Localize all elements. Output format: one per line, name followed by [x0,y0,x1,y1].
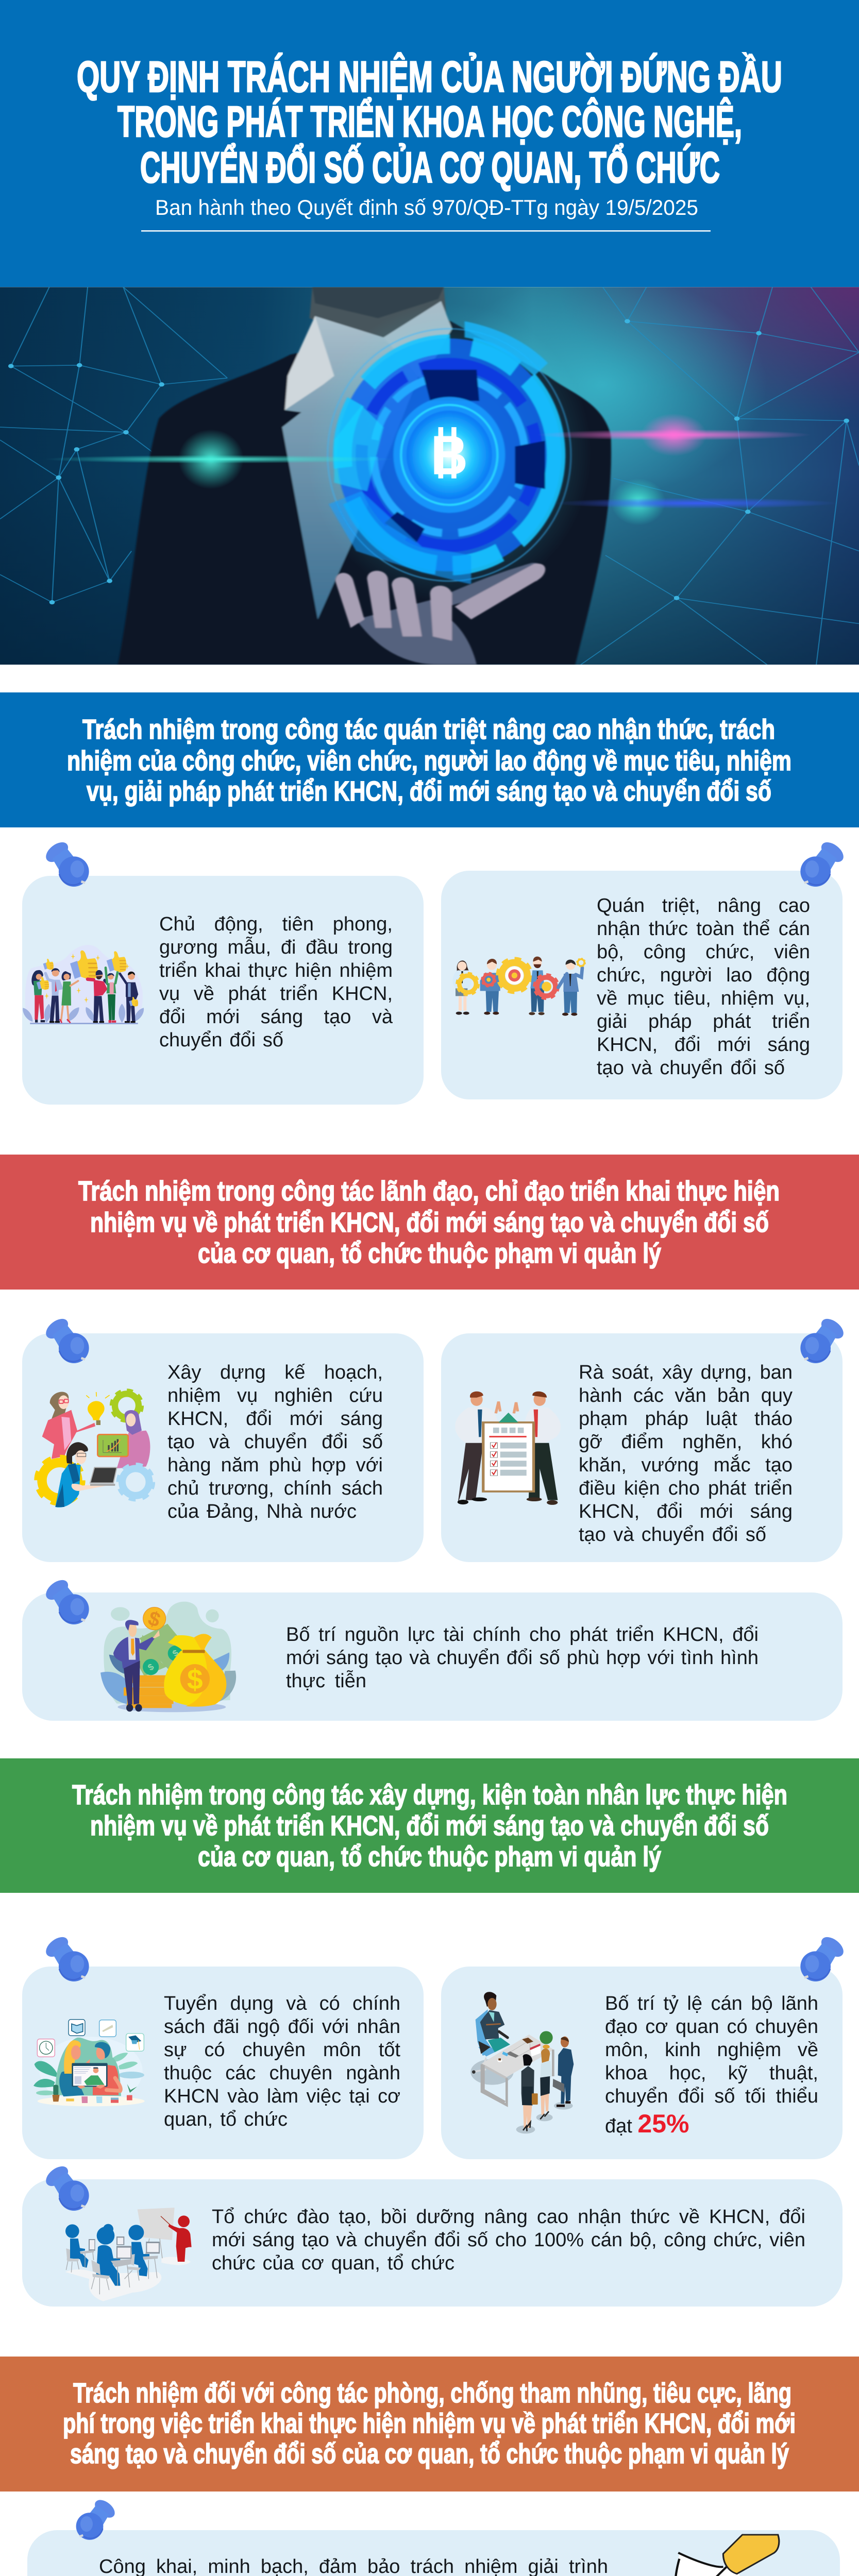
text block: sách đãi ngộ đối với nhân [164,2016,400,2038]
text block: sự có chuyên môn tốt [164,2039,400,2061]
section 3 heading band [0,1758,859,1893]
text block: KHCN, đổi mới sáng [579,1501,793,1522]
text block: Bố trí nguồn lực tài chính cho phát triển KHCN, đổi [286,1624,759,1646]
section 2 heading band: của cơ quan, tổ chức thuộc phạm vi quản lý [198,1238,661,1269]
icon: pin [800,838,847,887]
panel: proactive pioneering card [21,838,424,1105]
panel: training card [22,2162,843,2307]
illustration: people with thumbs up [21,945,146,1024]
text block: điều kiện cho phát triển [579,1478,793,1499]
text block: mới sáng tạo và chuyển đổi số phù hợp với tình hình [286,1647,759,1669]
section 3 heading band: của cơ quan, tổ chức thuộc phạm vi quản lý [198,1841,661,1872]
panel: awareness card [441,838,847,1099]
text block: về mục tiêu, nhiệm vụ, [597,988,810,1009]
text block: hành các văn bản quy [579,1385,793,1406]
text block: Rà soát, xây dựng, ban [579,1362,793,1383]
text block: đổi mới sáng tạo và [159,1006,393,1028]
icon: pin [42,2162,89,2211]
text block: chuyển đổi số [159,1029,283,1051]
text block: KHCN vào làm việc tại cơ [164,2086,400,2107]
text block: Xây dựng kế hoạch, [167,1362,383,1383]
text block: chuyển đổi số tối thiểu [605,2086,818,2107]
text block: mới sáng tạo và chuyển đổi số cho 100% cán bộ, công chức, viên [212,2229,805,2251]
icon: pin [800,1933,847,1981]
text block: môn, kinh nghiệm về [605,2039,818,2061]
text block: Quán triệt, nâng cao [597,895,810,917]
text block: nhận thức toàn thể cán [597,918,810,940]
text block: tạo và chuyển đổi số [579,1524,766,1546]
illustration: businessman with money bag: $ [145,1607,163,1632]
text block: chức của cơ quan, tổ chức [212,2252,454,2274]
text block: KHCN, đổi mới sáng [167,1408,383,1430]
header banner [0,0,859,287]
text block [579,1362,793,1552]
text block: Chủ động, tiên phong, [159,913,393,935]
illustration: online learning [33,2020,145,2106]
hero image: businessman holding a glowing bitcoin hologram: B [431,424,468,486]
text block: phạm pháp luật tháo [579,1408,793,1430]
icon: pin [76,2497,118,2540]
panel: planning card [22,1315,424,1562]
panel: financial resources card [22,1576,843,1721]
text block: bộ, công chức, viên [597,941,810,963]
text block: giải pháp phát triển [597,1011,810,1032]
illustration: businessman with money bag: $ [187,1663,203,1695]
illustration: announcement paper [675,2535,804,2576]
text block: hàng năm phù hợp với [167,1454,383,1476]
icon: pin [42,838,89,887]
text block: Tuyển dụng và có chính [164,1993,400,2014]
text block [605,1993,818,2147]
text block: KHCN, đổi mới sáng [597,1034,810,1056]
title [77,53,782,192]
text block: Bố trí tỷ lệ cán bộ lãnh [605,1993,818,2014]
text block: khăn, vướng mắc tạo [579,1454,793,1476]
illustration: businessman with money bag: $ [171,1648,180,1659]
text block: thực tiễn [286,1670,366,1692]
text block: Tổ chức đào tạo, bồi dưỡng nâng cao nhận thức về KHCN, đổi [212,2206,805,2228]
panel: anti-corruption card [27,2497,840,2576]
text block: chủ trương, chính sách [167,1478,383,1499]
text block: thuộc các chuyên ngành [164,2062,400,2084]
panel: leadership ratio card [441,1933,847,2159]
icon: pin [42,1315,89,1363]
panel: recruitment card [22,1933,424,2159]
text block [212,2206,805,2283]
text block: tạo và chuyển đổi số [167,1431,383,1453]
section 2 heading band [0,1155,859,1290]
text block: triển khai thực hiện nhiệm [159,960,393,981]
text block [167,1362,383,1532]
illustration: two men with a checklist [455,1392,561,1505]
text block [159,913,393,1058]
illustration: office meeting [470,1992,574,2133]
section 1 heading band [0,692,859,827]
section 4 heading band [0,2357,859,2492]
text block [597,895,810,1086]
subtitle: Ban hành theo Quyết định số 970/QĐ-TTg ngày 19/5/2025 [155,195,698,219]
text block [164,1993,400,2140]
illustration: classroom figures [65,2208,192,2301]
text block: chức, người lao động [597,964,810,986]
illustration: businessman with money bag: $ [146,1661,156,1673]
icon: pin [42,1576,89,1624]
text block: gỡ điểm nghẽn, khó [579,1431,793,1453]
text block: vụ về phát triển KHCN, [159,983,393,1005]
icon: pin [800,1315,847,1363]
illustration: research team with gears [37,1391,153,1507]
hero image: businessman holding a glowing bitcoin hologram [0,274,859,665]
panel: legal review card [441,1315,847,1562]
illustration: businessman with money bag [100,1602,236,1712]
text block [286,1624,759,1701]
text block: đạt 25% [605,2109,689,2138]
text block: đạo cơ quan có chuyên [605,2016,818,2038]
text block: quan, tổ chức [164,2109,288,2130]
text block: tạo và chuyển đổi số [597,1057,785,1079]
text block: gương mẫu, đi đầu trong [159,937,393,958]
icon: pin [42,1933,89,1981]
text block: khoa học, kỹ thuật, [605,2062,818,2084]
text block: của Đảng, Nhà nước [167,1501,357,1522]
text block: nhiệm vụ nghiên cứu [167,1385,383,1406]
illustration: team holding gears [452,957,585,1016]
